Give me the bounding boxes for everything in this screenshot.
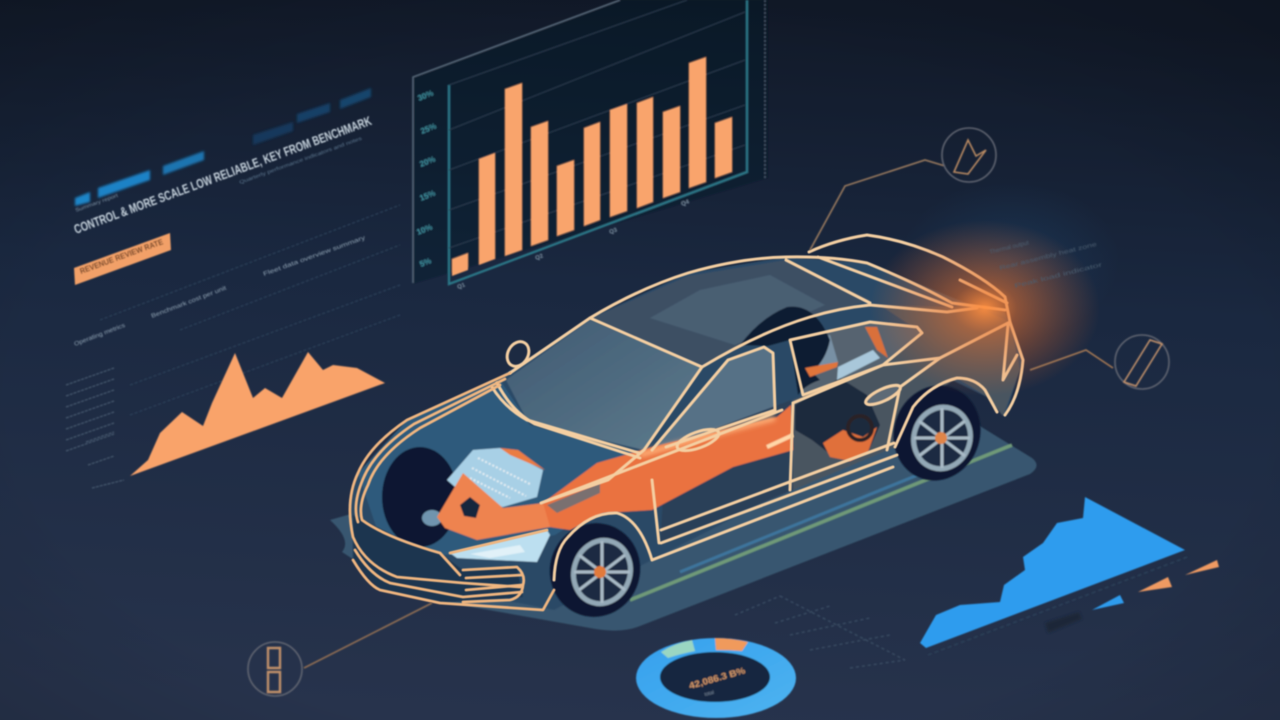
hot glow: rear — [870, 220, 1100, 396]
roof glass — [592, 260, 870, 365]
lower door panel — [660, 400, 793, 545]
dotted right edge — [764, 0, 766, 180]
right callout text: Rear assembly heat zone — [999, 242, 1098, 272]
small report captions — [74, 136, 366, 348]
faint text rows — [100, 205, 400, 415]
grid lines — [449, 0, 745, 248]
right callout text: Thermal output — [989, 240, 1030, 256]
callout: right — [1030, 335, 1169, 389]
orange tag: REVENUE REVIEW RATE — [79, 237, 165, 276]
car body fills — [349, 257, 1023, 610]
report heading: CONTROL & MORE SCALE LOW RELIABLE, KEY FROM BENCHMARK — [72, 113, 374, 237]
wheel well rear — [740, 307, 830, 395]
ground platform — [330, 420, 1037, 631]
small report captions: Summary report — [75, 193, 120, 214]
platform stripes — [630, 445, 1012, 600]
header tabs — [75, 88, 371, 206]
small orange bars — [1185, 560, 1219, 575]
engine block — [447, 448, 543, 507]
callout: bottom left — [248, 603, 432, 696]
rear mechanism — [795, 378, 880, 458]
bar chart: Q3 — [609, 227, 619, 236]
panel: report text — [66, 88, 400, 488]
small report captions: Fleet data overview summary — [263, 235, 366, 278]
car outline — [492, 235, 1023, 580]
headlight — [450, 530, 550, 562]
left table rows — [66, 368, 124, 488]
donut caption: total — [704, 690, 715, 698]
rear wheel — [881, 374, 993, 492]
axis labels: 30% — [416, 89, 435, 103]
drivetrain orange — [543, 405, 793, 530]
dotted table — [735, 596, 905, 668]
small blue bar — [1092, 595, 1124, 610]
axis labels: 10% — [415, 223, 434, 237]
vent slot — [547, 483, 600, 513]
dark blotch — [1045, 612, 1082, 633]
icon: link — [268, 648, 280, 692]
green segment — [661, 640, 695, 658]
callout: top right — [810, 128, 996, 250]
drivetrain highlight — [640, 418, 775, 455]
front bumper outline — [350, 373, 554, 610]
windshield — [506, 320, 702, 450]
icon: tool — [954, 140, 986, 174]
rear quarter panel — [793, 305, 1020, 490]
orange segment — [715, 638, 748, 651]
bar chart: Q4 — [681, 199, 691, 208]
bar chart: Q2 — [535, 253, 545, 262]
axis labels: 5% — [418, 256, 432, 269]
inner chart frame — [449, 0, 747, 284]
front bumper panel — [353, 515, 523, 603]
donut chart — [636, 638, 796, 718]
hood panel — [358, 380, 640, 555]
chart backdrop — [413, 0, 768, 284]
engine orange — [437, 473, 550, 540]
bars — [452, 57, 732, 276]
right callout text: Peak load indicator — [1014, 262, 1103, 290]
area chart: blue — [920, 497, 1219, 655]
small report captions: Operating metrics — [74, 323, 126, 348]
right callout text — [989, 240, 1103, 290]
axis labels: 25% — [419, 122, 438, 136]
axis labels: 20% — [418, 155, 437, 169]
area chart: orange — [130, 352, 385, 476]
outer chart frame — [413, 0, 620, 283]
icon: wrench — [1124, 340, 1162, 386]
glow: blue halo behind car — [900, 180, 1120, 340]
front wheel — [538, 511, 652, 629]
small report captions: Quarterly performance indicators and notes — [239, 136, 363, 186]
axis labels — [415, 89, 438, 269]
side windows — [652, 347, 775, 450]
bar chart — [413, 0, 768, 291]
car — [349, 220, 1100, 629]
donut value: 42,086.3 B% — [688, 665, 746, 691]
small report captions: Benchmark cost per unit — [151, 285, 228, 320]
wheel well front — [382, 447, 458, 547]
bar chart: Q1 — [457, 282, 467, 291]
axis labels: 15% — [418, 189, 437, 203]
